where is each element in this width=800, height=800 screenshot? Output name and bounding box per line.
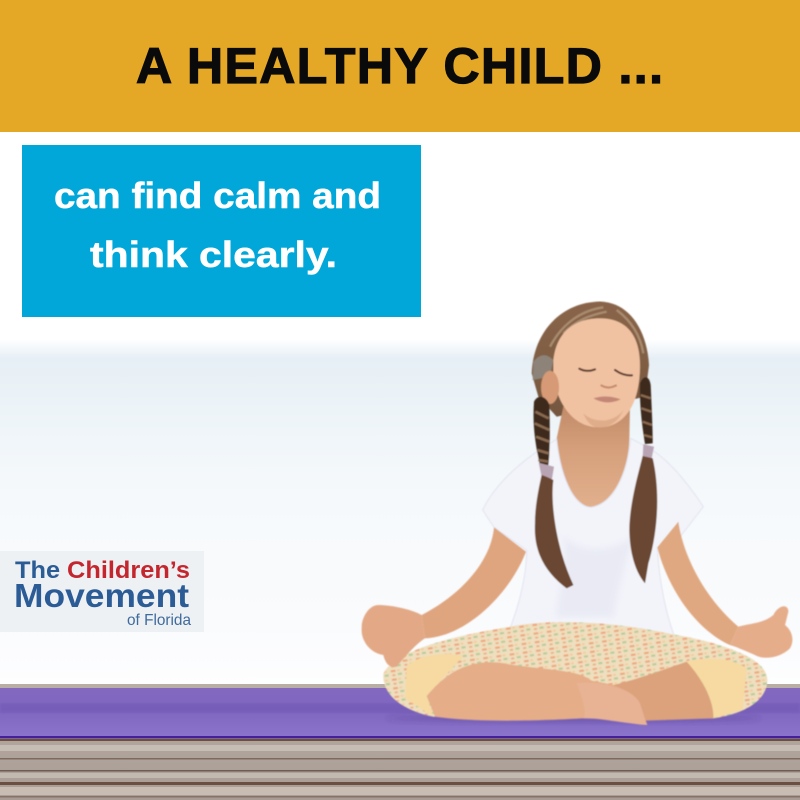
nose bbox=[601, 385, 617, 387]
left braid bbox=[534, 397, 550, 465]
left arm bbox=[422, 527, 526, 638]
logo: The Children's Movement of Florida: The Children’s bbox=[15, 557, 190, 584]
t-shirt bbox=[483, 438, 703, 635]
left calf bbox=[427, 662, 647, 725]
hair bbox=[532, 302, 649, 417]
message box bbox=[22, 145, 421, 317]
purple yoga mat bbox=[0, 688, 800, 738]
logo: The Children's Movement of Florida: of Florida bbox=[127, 612, 191, 629]
right calf bbox=[607, 662, 713, 721]
photo: meditating child bbox=[361, 302, 792, 725]
neck and chest bbox=[556, 403, 630, 507]
right knee patch bbox=[687, 659, 747, 718]
logo: The Children's Movement of Florida: Movement bbox=[14, 577, 189, 614]
title banner bbox=[0, 0, 800, 132]
right braid bbox=[640, 377, 653, 444]
eyes closed bbox=[579, 369, 632, 375]
title text: A HEALTHY CHILD ... bbox=[136, 38, 663, 94]
left knee patch bbox=[405, 654, 463, 717]
face bbox=[553, 318, 640, 427]
message text: think clearly. bbox=[90, 234, 337, 275]
foot bbox=[577, 683, 647, 725]
logo: The Children's Movement of Florida bbox=[0, 551, 204, 632]
patterned trousers bbox=[383, 622, 767, 718]
hair ties bbox=[539, 444, 654, 481]
mat shadow under child bbox=[387, 714, 760, 723]
ear bbox=[541, 371, 559, 404]
right hand bbox=[730, 606, 792, 658]
wooden deck bbox=[0, 684, 800, 800]
left hand bbox=[361, 605, 425, 667]
message text bbox=[54, 175, 381, 275]
right pigtail bbox=[629, 456, 657, 583]
left pigtail bbox=[535, 475, 573, 588]
mouth bbox=[593, 396, 621, 402]
right arm bbox=[657, 522, 738, 645]
message text: can find calm and bbox=[54, 175, 381, 216]
background: white sky and pale sea bbox=[0, 132, 800, 692]
